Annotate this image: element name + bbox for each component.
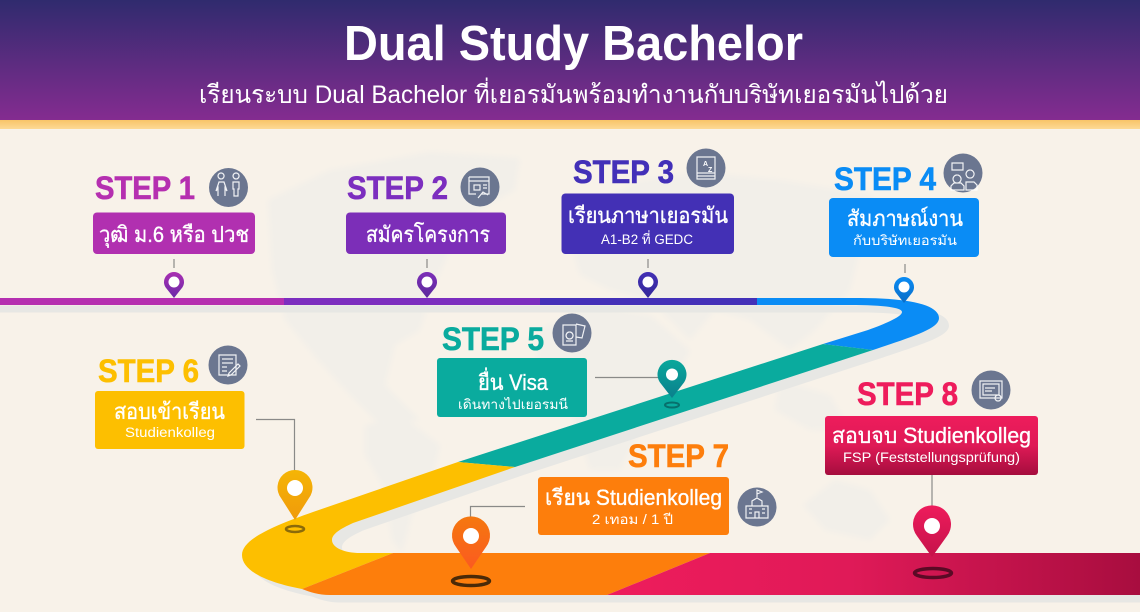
header band (0, 0, 1140, 120)
ground ring: step 5 (665, 402, 679, 408)
step 4 (829, 154, 982, 303)
box: step 8: สอบจบ Studienkolleg (832, 423, 1031, 448)
box: step 3 (562, 194, 734, 254)
pin: step 7 (452, 516, 490, 569)
box: step 5 (437, 358, 587, 417)
road segment: step 7 orange (302, 553, 710, 595)
heading: step 5: STEP 5 (442, 321, 544, 357)
icon: dictionary (686, 148, 726, 188)
box: step 1 (93, 212, 255, 254)
icon: interview (944, 154, 982, 192)
ground ring: step 8 (914, 568, 952, 578)
icon: passport and visa (552, 314, 592, 352)
icon: school building (738, 488, 776, 526)
box: step 8: FSP (Feststellungsprüfung) (843, 450, 1020, 465)
connector: step 2 (426, 259, 428, 268)
road segment: step 2 purple (284, 298, 541, 305)
world map backdrop (268, 152, 895, 553)
box: step 7: เรียน Studienkolleg (545, 485, 722, 510)
icon: web application (460, 168, 500, 206)
heading: step 4: STEP 4 (834, 161, 936, 197)
heading: step 1: STEP 1 (95, 170, 195, 206)
box: step 5: ยื่น Visa (478, 367, 549, 395)
icon: dictionary: Z (708, 167, 713, 174)
subtitle: เรียนระบบ Dual Bachelor ที่เยอรมันพร้อมทำงานกับบริษัทเยอรมันไปด้วย (199, 77, 948, 109)
road shadow (0, 306, 1140, 602)
icon: students (209, 168, 248, 207)
step 6 (95, 346, 313, 532)
box: step 3: A1-B2 ที่ GEDC (601, 230, 693, 247)
box: step 7: 2 เทอม / 1 ปี (592, 512, 673, 527)
step 8 (825, 370, 1038, 578)
heading: step 7: STEP 7 (628, 438, 729, 474)
pin: step 4 (894, 277, 914, 303)
box: step 7 (538, 477, 729, 535)
box: step 1: วุฒิ ม.6 หรือ ปวช (99, 222, 249, 248)
step 1 (93, 168, 255, 298)
heading: step 8: STEP 8 (857, 376, 958, 412)
box: step 4 (829, 198, 979, 257)
winding road (0, 298, 1140, 595)
box: step 3: เรียนภาษาเยอรมัน (568, 203, 728, 228)
box: step 2: สมัครโครงการ (366, 222, 490, 247)
box: step 6 (95, 391, 244, 449)
road segment: step 6 yellow (242, 462, 515, 589)
road segment: step 8 crimson (607, 553, 1140, 595)
gold strip under header (0, 120, 1140, 129)
icon: exam paper (208, 346, 248, 384)
connector: step 8 (931, 475, 933, 507)
heading: step 6: STEP 6 (98, 353, 199, 389)
road segment: step 3 indigo (540, 298, 758, 305)
pin: step 1 (164, 272, 184, 298)
ground ring: step 6 (286, 526, 304, 532)
box: step 4: กับบริษัทเยอรมัน (853, 233, 957, 248)
step 3 (562, 148, 734, 298)
pin: step 6 (278, 470, 313, 520)
box: step 4: สัมภาษณ์งาน (847, 206, 963, 231)
icon: certificate (972, 370, 1010, 410)
box: step 8 (825, 416, 1038, 475)
heading: step 3: STEP 3 (573, 154, 674, 190)
icon: dictionary: A (703, 161, 708, 168)
step 5 (437, 314, 686, 417)
connector: step 3 (647, 259, 649, 268)
road segment: step 1 magenta (0, 298, 285, 305)
box: step 2 (346, 212, 506, 254)
road segment: step 5 teal (458, 344, 873, 467)
connector: step 4 (904, 264, 906, 273)
pin: step 5 (657, 360, 686, 398)
title: Dual Study Bachelor (344, 17, 803, 71)
connector: step 1 (173, 259, 175, 268)
heading: step 2: STEP 2 (347, 170, 448, 206)
pin: step 8 (913, 505, 951, 557)
pin: step 2 (417, 272, 437, 298)
connector: step 5 (595, 376, 660, 378)
pin: step 3 (638, 272, 658, 298)
road segment: step 4 blue (757, 298, 939, 350)
connector: step 7 (470, 506, 525, 517)
step 2 (346, 168, 506, 298)
step 7 (452, 438, 776, 586)
ground ring: step 7 (452, 576, 490, 586)
box: step 5: เดินทางไปเยอรมนี (458, 397, 568, 412)
connector: step 6 (256, 420, 294, 471)
box: step 6: Studienkolleg (125, 425, 215, 440)
box: step 6: สอบเข้าเรียน (114, 399, 225, 424)
